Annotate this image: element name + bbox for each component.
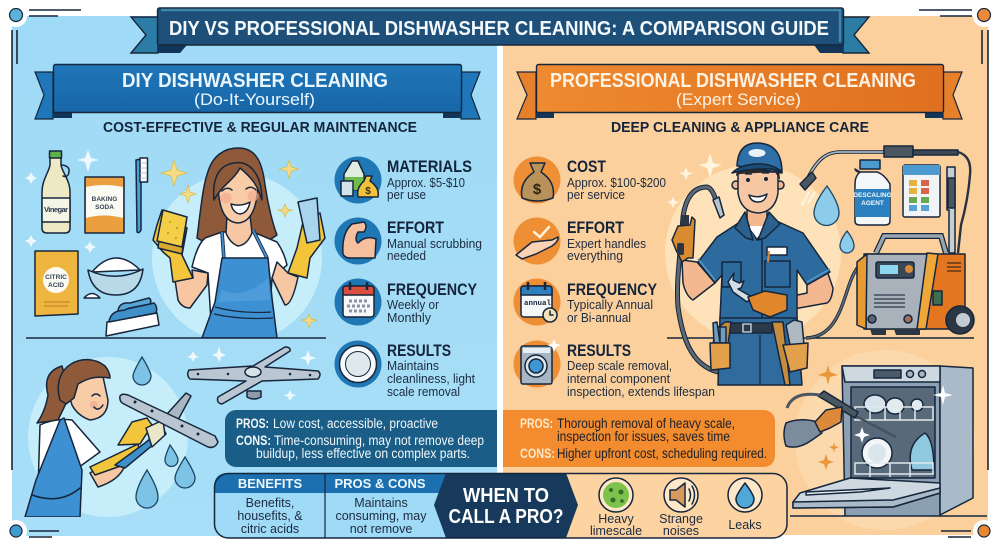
DIY feature: frequency: FREQUENCY (387, 281, 477, 299)
table: benefits column (237, 476, 303, 536)
professional feature: frequency (514, 278, 657, 326)
professional feature: results (514, 339, 715, 399)
panel: professional background (503, 5, 995, 542)
professional feature: cost: per service (567, 187, 625, 202)
icon: heavy limescale: Heavy (598, 512, 634, 526)
icon: strange noises: Strange (659, 512, 703, 526)
vinegar bottle (42, 151, 70, 233)
icon: flexed arm (334, 218, 382, 264)
when to call a pro badge (434, 473, 578, 538)
left arm (682, 260, 715, 300)
illustration: woman scrubbing spray arm (25, 357, 188, 517)
DIY feature: materials: MATERIALS (387, 158, 472, 176)
DIY feature: frequency: Monthly (387, 310, 431, 325)
DIY feature: frequency: Weekly or (387, 297, 440, 312)
icon: money bag (514, 156, 560, 204)
vinegar bottle: Vinegar (44, 205, 68, 214)
when to call a pro badge: CALL A PRO? (448, 506, 564, 528)
table: pros and cons column (334, 476, 427, 536)
icon: washer machine (514, 339, 561, 388)
professional feature: frequency: Typically Annual (567, 297, 653, 312)
neck and collar (747, 205, 767, 240)
DIY feature: results: RESULTS (387, 342, 451, 360)
icon: bottle and money bag: $ (365, 186, 371, 197)
illustration: open dishwasher with spray wand (784, 350, 987, 530)
icon: heavy limescale (590, 478, 642, 538)
panel: DIY background (5, 5, 497, 542)
illustration: spray arm in hand (120, 393, 218, 447)
illustration: smiling woman with sponge and glass (152, 148, 325, 343)
professional feature: cost: COST (567, 158, 606, 176)
DIY feature: materials: Approx. $5-$10 (387, 175, 465, 190)
icon: calendar (334, 278, 382, 326)
shirt (698, 218, 830, 318)
illustration: technician (665, 143, 974, 385)
right arm (788, 265, 833, 310)
professional feature: frequency: FREQUENCY (567, 281, 657, 299)
professional feature: effort: EFFORT (567, 219, 624, 237)
pros and cons: professional (503, 410, 775, 467)
DIY feature: effort: Manual scrubbing (387, 236, 482, 251)
DIY ribbon heading: DIY DISHWASHER CLEANING (122, 70, 388, 92)
test strip card (903, 165, 940, 217)
professional ribbon heading: (Expert Service) (676, 90, 801, 109)
icons: water drops (133, 357, 195, 508)
professional subheading: DEEP CLEANING & APPLIANCE CARE (611, 120, 869, 136)
illustration: cleaning supplies (25, 150, 159, 336)
DIY feature: effort: needed (387, 248, 426, 263)
legs (718, 317, 802, 385)
illustration: pressure washer and supplies: DESCALING (853, 192, 892, 199)
professional feature: results: internal component (567, 371, 670, 386)
baking soda bag (85, 177, 124, 233)
table: benefits column: citric acids (241, 522, 299, 536)
illustration: pressure washer and supplies: AGENT (861, 200, 884, 207)
DIY feature: effort (334, 218, 482, 264)
baking soda bag: SODA (95, 204, 114, 211)
icon: leaks: Leaks (728, 518, 762, 532)
pros and cons: professional: CONS: (520, 446, 555, 461)
table: pros and cons column: PROS & CONS (334, 476, 426, 491)
table: pros and cons column: Maintains (354, 496, 408, 510)
professional feature: effort: everything (567, 248, 623, 263)
pros and cons: professional: Thorough removal of heavy scale, (557, 416, 735, 431)
professional feature: effort (514, 218, 646, 264)
table: benefits column: housefits, & (237, 509, 303, 523)
professional feature: frequency: or Bi-annual (567, 310, 631, 325)
when to call a pro badge: WHEN TO (463, 485, 549, 507)
pros and cons: DIY: PROS: (236, 416, 269, 431)
pros and cons: DIY (225, 410, 497, 467)
toothbrush (136, 158, 148, 233)
wrench and right glove (728, 273, 752, 302)
table: pros and cons column: consuming, may (335, 509, 427, 523)
title banner: DIY VS PROFESSIONAL DISHWASHER CLEANING: A COMPARISON GUIDE (169, 18, 829, 40)
descaling agent bottle (855, 169, 890, 225)
sparkles (667, 153, 722, 208)
professional feature: results: Deep scale removal, (567, 358, 672, 373)
DIY feature: frequency (334, 278, 477, 326)
divider line (26, 337, 326, 339)
citric acid bag: CITRIC (45, 274, 67, 281)
icon: strange noises (659, 478, 703, 538)
icon: hand with check (514, 218, 560, 264)
powder bowl (84, 258, 143, 298)
pros and cons: DIY: Time-consuming, may not remove deep (274, 433, 484, 448)
head (732, 181, 740, 189)
belt and pouches (730, 323, 772, 333)
hose (677, 187, 720, 372)
pros and cons: professional: inspection for issues, saves time (557, 429, 730, 444)
scrub brush (106, 298, 159, 336)
DIY ribbon heading: (Do-It-Yourself) (194, 90, 315, 109)
pros and cons: DIY: Low cost, accessible, proactive (273, 416, 438, 431)
DIY feature: materials: per use (387, 187, 426, 202)
DIY feature: effort: EFFORT (387, 219, 444, 237)
DIY feature: results (334, 340, 475, 399)
icon: money bag: $ (533, 181, 542, 198)
icon: annual calendar: annual (524, 300, 552, 308)
table: benefits column: BENEFITS (238, 476, 302, 491)
professional ribbon heading (517, 64, 962, 119)
DIY feature: results: scale removal (387, 384, 460, 399)
drops (814, 186, 839, 225)
baking soda bag: BAKING (92, 196, 117, 203)
professional feature: results: inspection, extends lifespan (567, 384, 715, 399)
professional feature: cost: Approx. $100-$200 (567, 175, 666, 190)
icon: annual calendar (514, 278, 560, 326)
pros and cons: professional: Higher upfront cost, scheduling required. (557, 446, 767, 461)
DIY feature: results: Maintains (387, 358, 439, 373)
professional feature: effort: Expert handles (567, 236, 646, 251)
cap (737, 143, 782, 173)
DIY subheading: COST-EFFECTIVE & REGULAR MAINTENANCE (103, 120, 417, 136)
DIY ribbon heading (35, 64, 480, 119)
sparkles (25, 150, 99, 253)
professional feature: cost (514, 156, 666, 204)
pros and cons: DIY: buildup, less effective on complex parts. (256, 446, 470, 461)
machine (876, 236, 946, 253)
citric acid bag (35, 251, 78, 316)
professional ribbon heading: PROFESSIONAL DISHWASHER CLEANING (550, 70, 916, 92)
icon: heavy limescale: limescale (590, 524, 642, 538)
bottom summary bar (214, 473, 787, 538)
DIY feature: results: cleanliness, light (387, 371, 475, 386)
table: pros and cons column: not remove (350, 522, 412, 536)
left glove (672, 217, 695, 262)
title banner (131, 8, 869, 53)
icon: strange noises: noises (663, 524, 699, 538)
pros and cons: DIY: CONS: (236, 433, 271, 448)
pros and cons: professional: PROS: (520, 416, 553, 431)
icon: leaks (728, 478, 762, 532)
illustration: clean spray arm (187, 346, 320, 404)
DIY feature: materials (334, 156, 472, 204)
citric acid bag: ACID (48, 282, 64, 289)
table: benefits column: Benefits, (246, 496, 294, 510)
sparkles: gold stars around woman (161, 160, 317, 328)
professional feature: results: RESULTS (567, 342, 631, 360)
illustration: pressure washer and supplies (667, 146, 974, 338)
icon: clean plate (334, 340, 382, 388)
